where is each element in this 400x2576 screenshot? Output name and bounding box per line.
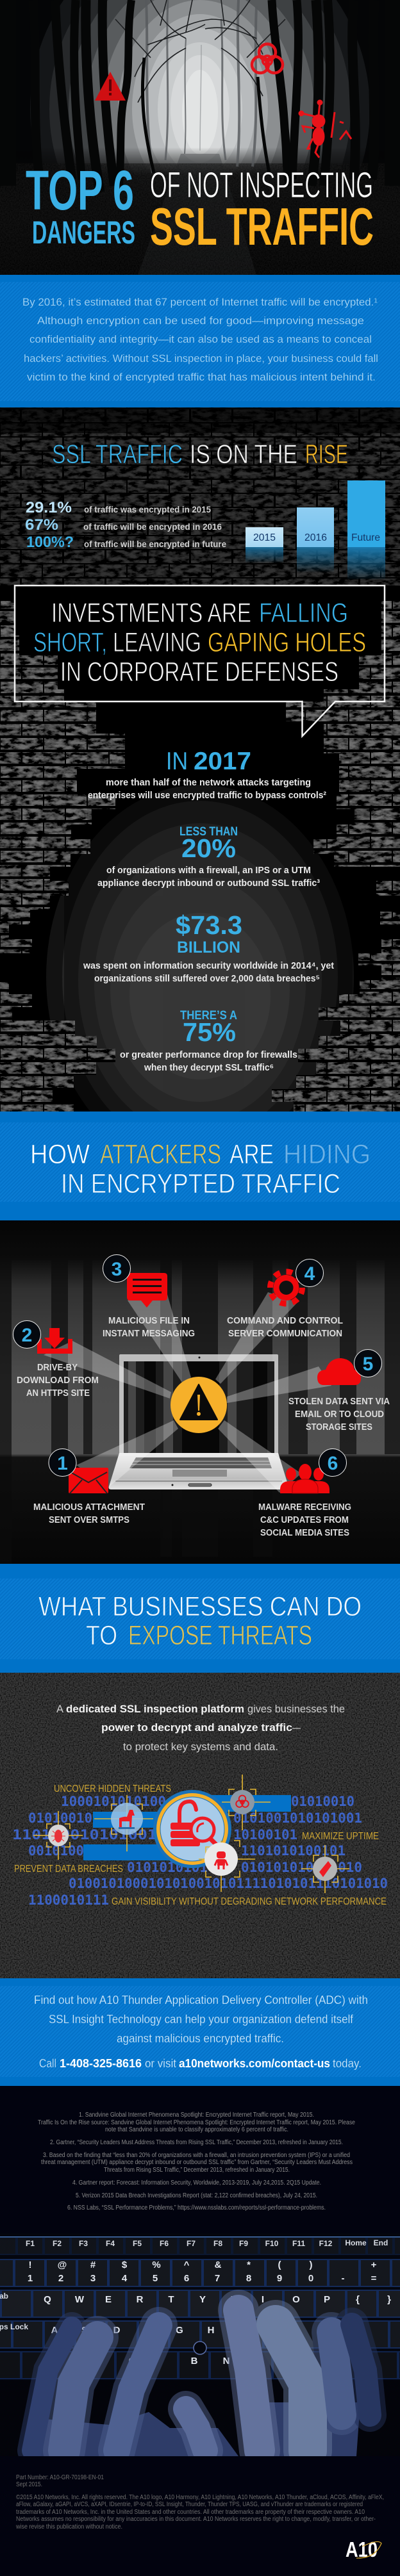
key labels: S — [81, 2325, 88, 2336]
key labels: R — [137, 2294, 144, 2305]
speech bubble outline — [15, 586, 385, 736]
item 5: stolen data: STORAGE SITES — [306, 1422, 372, 1432]
key labels: U — [231, 2294, 237, 2305]
key labels: 6 — [184, 2273, 189, 2284]
stat: in 2017 — [88, 748, 326, 801]
panel: footnotes: 6. NSS Labs, “SSL Performance Problems,” https://www.nsslabs.com/reports/ssl-performance-problems. — [67, 2204, 326, 2211]
stat: $73.3 billion: organizations still suffered over 2,000 data breaches⁵ — [94, 973, 320, 984]
part number and legal text — [15, 2474, 384, 2531]
binary stream diagram: 0101001010101001 — [233, 1810, 362, 1826]
panel: footnotes: 3. Based on the finding that “less than 20% of organizations with a firewall, an intrusion prevention system (IPS) or a unified — [43, 2152, 350, 2159]
panel: footnotes — [0, 2086, 400, 2576]
heading — [52, 439, 348, 469]
key labels: F1 — [26, 2239, 35, 2248]
key labels: # — [90, 2260, 96, 2270]
call to action text: or visit — [145, 2056, 176, 2070]
stat: 75% — [120, 1009, 297, 1073]
panel: hands on keyboard photo — [0, 2233, 400, 2495]
item 2: drive-by download: DRIVE-BY — [37, 1363, 78, 1373]
call to action text: a10networks.com/contact-us — [179, 2056, 330, 2070]
item 6: malware updates: MALWARE RECEIVING — [258, 1502, 351, 1513]
item 6: malware updates: 6 — [328, 1453, 338, 1474]
key labels: Home — [345, 2238, 367, 2247]
binary stream diagram: 01010010 — [28, 1810, 92, 1826]
panel: how attackers are hiding heading band — [0, 1112, 400, 1220]
key labels: % — [152, 2260, 161, 2270]
icon: inspection magnifier circle — [153, 1790, 231, 1868]
key labels: F5 — [133, 2239, 142, 2248]
hole in the wall — [0, 586, 400, 1112]
call to action text: today. — [333, 2056, 362, 2070]
forest trunks — [0, 1256, 400, 1563]
key labels: 2 — [58, 2273, 63, 2284]
panel: footnotes: 5. Verizon 2015 Data Breach Investigations Report (stat: 2,122 confirmed breaches), July 24, 2015. — [76, 2192, 317, 2199]
heading: IS ON THE — [190, 439, 297, 469]
key labels: H — [208, 2325, 214, 2336]
panel: broken brick wall with statistics — [0, 586, 400, 1169]
target: robot — [199, 1841, 255, 1892]
key labels: F11 — [292, 2239, 305, 2248]
stats list: 100%? — [26, 534, 74, 551]
item 1: malicious attachment: 1 — [57, 1453, 68, 1474]
target: trojan horse — [94, 1795, 153, 1851]
panel: dedicated platform on dark texture — [0, 1673, 400, 1978]
stat: 75%: THERE’S A — [180, 1009, 237, 1022]
key labels: 0 — [308, 2273, 313, 2284]
binary stream diagram: 0100101000101010010101111010101110101010 — [69, 1876, 388, 1891]
intro text: confidentiality and integrity—it can also be used as a means to conceal — [29, 333, 372, 345]
key labels: } — [387, 2294, 391, 2305]
intro text: hackers’ activities. Without SSL inspection in place, your business could fall — [24, 352, 378, 365]
panel: how attackers are hiding heading band: HOW — [30, 1139, 90, 1170]
binary stream diagram — [12, 1775, 388, 1908]
laptop — [109, 1354, 288, 1489]
key labels: Alt — [105, 2386, 115, 2395]
panel: footnotes: 1. Sandvine Global Internet Phenomena Spotlight: Encrypted Internet Traffic report, May 2015. — [79, 2112, 314, 2119]
item 4: command and control: 4 — [304, 1263, 315, 1284]
description text: dedicated SSL inspection platform — [66, 1703, 244, 1715]
key labels: Y — [199, 2294, 206, 2305]
heading: investments: LEAVING — [113, 627, 201, 658]
key labels: ! — [28, 2260, 32, 2270]
concrete glow — [46, 785, 354, 1112]
key labels: F12 — [319, 2239, 333, 2248]
binary stream diagram: 10100101 — [233, 1827, 297, 1842]
item 2: drive-by download: DOWNLOAD FROM — [17, 1375, 99, 1386]
ground path — [42, 149, 363, 275]
key labels: F6 — [160, 2239, 169, 2248]
panel: SSL traffic on the rise, dark brick wall — [0, 407, 400, 586]
key labels: F — [144, 2325, 151, 2336]
item 6: malware updates: SOCIAL MEDIA SITES — [260, 1528, 349, 1538]
item 5: stolen data: EMAIL OR TO CLOUD — [295, 1409, 384, 1420]
key labels: 4 — [122, 2273, 128, 2284]
stat: in 2017: enterprises will use encrypted traffic to bypass controls² — [88, 790, 326, 801]
key labels: F9 — [239, 2239, 248, 2248]
stat: in 2017: IN — [166, 748, 188, 775]
key labels: F8 — [213, 2239, 222, 2248]
key labels: E — [105, 2294, 112, 2305]
key labels: ^ — [184, 2260, 190, 2270]
panel: footnotes: 2. Gartner, “Security Leaders Must Address Threats from Rising SSL Traffic,” December 2013, refreshed in January 2015. — [50, 2139, 343, 2146]
key labels: & — [215, 2260, 222, 2270]
item 5: stolen data — [288, 1349, 390, 1432]
stat: less than 20%: LESS THAN — [179, 825, 238, 839]
key labels: ) — [309, 2260, 313, 2270]
title: DANGERS — [32, 215, 135, 250]
target: biohazard — [222, 1775, 271, 1830]
bar chart: Future — [351, 532, 380, 543]
key labels: $ — [122, 2260, 128, 2270]
panel: footnotes: Threats from Rising SSL Traffic,” December 2013, refreshed in January 2015. — [104, 2167, 290, 2174]
branch arch — [115, 0, 285, 103]
key labels: = — [371, 2273, 377, 2284]
stat: in 2017: more than half of the network attacks targeting — [106, 777, 311, 788]
description text: — — [292, 1721, 301, 1734]
stat: $73.3 billion — [83, 910, 334, 984]
description text: gives businesses the — [247, 1703, 345, 1715]
panel: footnotes: threat management (UTM) appliance decrypt inbound or outbound SSL traffic” from Gartner, “Security Leaders Must Address — [41, 2159, 353, 2166]
logo: A10: A10 — [346, 2538, 378, 2561]
benefit labels — [14, 1784, 387, 1907]
binary stream diagram: 0010100 — [28, 1843, 84, 1858]
benefit labels: UNCOVER HIDDEN THREATS — [54, 1784, 171, 1794]
panel: call to action band — [0, 1978, 400, 2086]
description text: to protect key systems and data. — [123, 1741, 278, 1753]
item 1: malicious attachment — [33, 1449, 145, 1525]
item 3: instant messaging — [103, 1254, 195, 1339]
panel: footnotes: note that Sandvine is unable to classify approximately 6 percent of traffic. — [105, 2126, 288, 2133]
key labels: P — [324, 2294, 330, 2305]
item 2: drive-by download: 2 — [22, 1325, 32, 1346]
key labels: - — [341, 2273, 345, 2284]
stat: less than 20% — [97, 825, 320, 889]
key labels: @ — [58, 2260, 67, 2270]
panel: misty forest hero — [0, 0, 400, 291]
stats list: 29.1% — [26, 499, 72, 516]
bar chart: 2015 — [253, 532, 276, 543]
item 3: instant messaging: INSTANT MESSAGING — [103, 1329, 195, 1339]
key labels: O — [292, 2294, 300, 2305]
part number and legal text: wise revise this publication without notice. — [15, 2523, 122, 2531]
part number and legal text: Sept 2015. — [16, 2481, 42, 2488]
icon: warning circle — [171, 1377, 227, 1433]
hands — [31, 2310, 370, 2456]
panel: footnotes: Traffic Is On the Rise source: Sandvine Global Internet Phenomena Spotlight: Encrypted Internet Traffic report, May 2015. Please — [38, 2119, 355, 2126]
panel: how attackers are hiding heading band: ARE — [229, 1139, 274, 1170]
key labels: End — [374, 2238, 388, 2247]
key labels — [0, 2238, 391, 2395]
benefit labels: PREVENT DATA BREACHES — [14, 1864, 123, 1875]
description text: power to decrypt and analyze traffic — [101, 1721, 292, 1734]
distant grey trees — [146, 0, 256, 173]
binary stream diagram: 010101010101010 — [241, 1860, 362, 1875]
benefit labels: MAXIMIZE UPTIME — [302, 1831, 379, 1842]
call to action text: 1-408-325-8616 — [60, 2056, 142, 2070]
call to action text: against malicious encrypted traffic. — [117, 2031, 284, 2045]
key labels: F3 — [79, 2239, 88, 2248]
panel: what businesses can do heading band: EXPOSE THREATS — [128, 1620, 312, 1651]
key labels: 8 — [246, 2273, 251, 2284]
light beams — [44, 1288, 331, 1493]
target: shield — [301, 1845, 349, 1893]
binary stream diagram: 0101010101 — [127, 1860, 208, 1875]
stat: less than 20%: appliance decrypt inbound or outbound SSL traffic³ — [97, 878, 320, 889]
key labels: A — [51, 2325, 58, 2336]
stat: less than 20%: 20% — [181, 833, 236, 863]
binary stream diagram: 1101010100101 — [241, 1843, 346, 1858]
stats list: 67% — [25, 516, 58, 534]
part number and legal text: trademarks of A10 Networks, Inc. in the United States and other countries. All other trademarks are property of their respective owners. A10 — [16, 2509, 365, 2516]
intro text: victim to the kind of encrypted traffic that has malicious intent behind it. — [27, 371, 376, 383]
key labels: * — [247, 2260, 251, 2270]
icon: red bug — [299, 101, 351, 158]
item 2: drive-by download: AN HTTPS SITE — [26, 1388, 90, 1399]
key labels: C — [129, 2356, 136, 2367]
call to action text: SSL Insight Technology can help your organization defend itself — [49, 2012, 354, 2026]
item 1: malicious attachment: MALICIOUS ATTACHMENT — [33, 1502, 145, 1513]
key labels: { — [356, 2294, 360, 2305]
key labels: F4 — [106, 2239, 115, 2248]
bar chart — [246, 480, 385, 579]
item 4: command and control: SERVER COMMUNICATION — [228, 1329, 342, 1339]
title: TOP 6 — [26, 160, 134, 222]
key labels: Q — [44, 2294, 51, 2305]
key labels: N — [223, 2356, 229, 2367]
dark foreground trunks — [8, 0, 392, 192]
item 1: malicious attachment: SENT OVER SMTPS — [49, 1515, 129, 1525]
item 3: instant messaging: MALICIOUS FILE IN — [108, 1316, 190, 1326]
binary stream diagram: 110100010101001 — [12, 1827, 157, 1842]
binary stream diagram: 1000101010100 — [61, 1794, 166, 1809]
intro text: By 2016, it’s estimated that 67 percent of Internet traffic will be encrypted.¹ — [22, 296, 378, 308]
heading: SSL TRAFFIC — [52, 439, 183, 469]
panel: footnotes: 4. Gartner report: Forecast: Information Security, Worldwide, 2013-2019, July 24,2015. 2Q15 Update. — [72, 2179, 321, 2186]
heading: investments: FALLING — [259, 598, 348, 628]
item 6: malware updates — [258, 1449, 351, 1538]
panel: how attackers are hiding heading band: ATTACKERS — [100, 1139, 221, 1170]
stat: in 2017: 2017 — [194, 748, 251, 775]
item 6: malware updates: C&C UPDATES FROM — [260, 1515, 349, 1525]
stat: 75%: when they decrypt SSL traffic⁶ — [144, 1062, 274, 1073]
heading: investments: INVESTMENTS ARE — [51, 598, 251, 628]
stat: $73.3 billion: was spent on information security worldwide in 2014⁴, yet — [83, 960, 334, 971]
binary stream diagram: 01010010 — [291, 1794, 354, 1809]
icon: biohazard — [252, 44, 283, 73]
panel: what businesses can do heading band — [0, 1564, 400, 1673]
item 4: command and control — [227, 1259, 343, 1339]
key labels: 9 — [277, 2273, 282, 2284]
key labels: D — [113, 2325, 121, 2336]
description text: A — [56, 1703, 64, 1715]
key labels: B — [191, 2356, 198, 2367]
stats list: of traffic was encrypted in 2015 — [84, 505, 211, 514]
call to action text: Find out how A10 Thunder Application Delivery Controller (ADC) with — [34, 1993, 368, 2006]
title — [26, 170, 373, 245]
call to action text — [34, 1993, 368, 2070]
panel: how attackers are hiding heading band: IN ENCRYPTED TRAFFIC — [61, 1169, 340, 1199]
description text — [56, 1703, 345, 1753]
call to action text: Call — [39, 2056, 56, 2070]
part number and legal text: Part Number: A10-GR-70198-EN-01 — [16, 2474, 104, 2481]
key labels: ( — [278, 2260, 281, 2270]
item 5: stolen data: 5 — [363, 1354, 373, 1375]
key labels: G — [176, 2325, 183, 2336]
panel: how attackers are hiding heading band: HIDING — [283, 1139, 371, 1170]
key labels: F10 — [265, 2239, 279, 2248]
item 5: stolen data: STOLEN DATA SENT VIA — [288, 1397, 390, 1407]
key labels: 5 — [153, 2273, 158, 2284]
item 2: drive-by download — [13, 1321, 99, 1399]
target: bug — [33, 1811, 83, 1860]
item 3: instant messaging: 3 — [112, 1259, 122, 1280]
key labels: 7 — [215, 2273, 220, 2284]
stat: 75%: 75% — [183, 1017, 236, 1047]
heading: investments — [33, 598, 366, 687]
key labels: I — [262, 2294, 264, 2305]
stat: less than 20%: of organizations with a firewall, an IPS or a UTM — [106, 865, 311, 876]
intro text: Although encryption can be used for good—improving message — [37, 315, 364, 327]
key labels: F7 — [187, 2239, 196, 2248]
stat: 75%: or greater performance drop for firewalls — [120, 1049, 297, 1060]
intro text — [22, 296, 378, 383]
key labels: W — [75, 2294, 85, 2305]
stat: $73.3 billion: BILLION — [177, 939, 240, 956]
stat: $73.3 billion: $73.3 — [176, 910, 242, 940]
panel: what businesses can do heading band: TO — [86, 1620, 117, 1651]
key labels: F2 — [53, 2239, 62, 2248]
panel: attack vectors over dark forest — [0, 1220, 400, 1564]
stats list: of traffic will be encrypted in future — [84, 539, 226, 549]
stats list: of traffic will be encrypted in 2016 — [83, 522, 222, 532]
bar chart: 2016 — [304, 532, 327, 543]
key labels: + — [371, 2260, 377, 2270]
binary stream diagram: 1100010111 — [28, 1892, 109, 1908]
stats list — [25, 499, 226, 551]
panel: intro blue band — [0, 275, 400, 407]
key labels: T — [168, 2294, 174, 2305]
heading: investments: SHORT, — [33, 627, 107, 658]
heading: RISE — [305, 439, 348, 469]
key labels: 3 — [90, 2273, 96, 2284]
item 4: command and control: COMMAND AND CONTROL — [227, 1316, 343, 1326]
key labels: 1 — [28, 2273, 33, 2284]
icon: warning triangle — [95, 72, 126, 101]
